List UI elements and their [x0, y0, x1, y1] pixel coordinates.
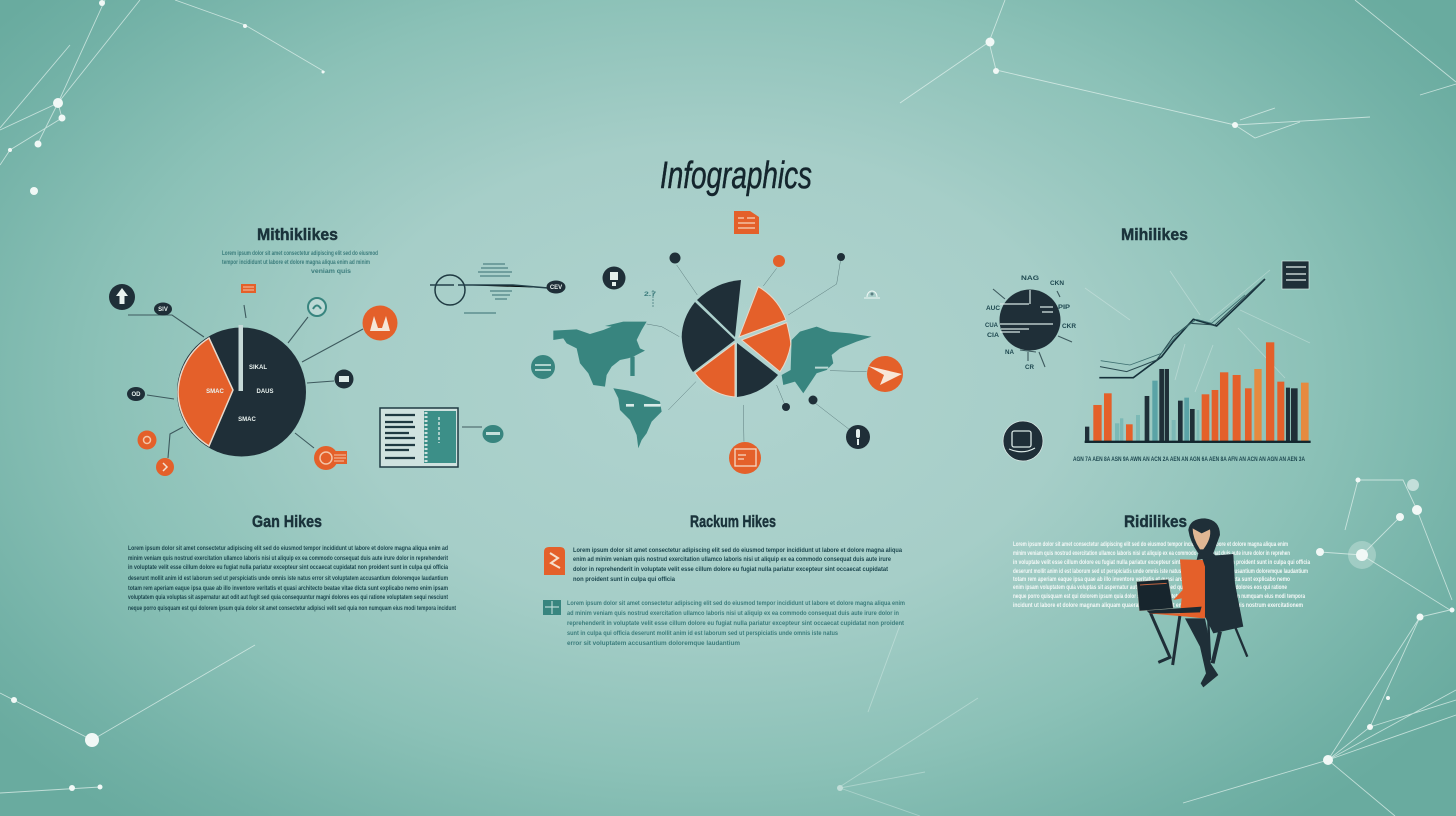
- panel: right text block with person: [1013, 512, 1310, 687]
- small gauge diagram: [430, 264, 548, 313]
- pie chart: centre: [682, 280, 791, 397]
- icon: dark pill: SIV: [158, 307, 168, 313]
- icon: orange document top: [734, 211, 759, 234]
- body text: left: in voluptate velit esse cillum dolore eu fugiat nulla pariatur excepteur sint occaecat cupidatat non proident sunt in culpa qui officia: [128, 564, 448, 571]
- icon: orange small circle upper: [138, 430, 156, 450]
- icon: dark badge top left: [109, 284, 135, 310]
- icon: tiny outline bell: [864, 291, 880, 298]
- panel: centre map section: [430, 211, 903, 474]
- laptop accent: [1140, 583, 1167, 585]
- radial gauge chart: CKR: [1062, 323, 1076, 330]
- icon: orange arrow badge: [867, 356, 903, 392]
- body text: right: deserunt mollit anim id est laborum sed ut perspiciatis unde omnis iste natus error sit voluptatem accusantium doloremque laudantium: [1013, 568, 1308, 575]
- body text: right: in voluptate velit esse cillum dolore eu fugiat nulla pariatur excepteur sint occaecat cupidatat non proident sunt in culpa qui officia: [1013, 559, 1310, 566]
- icon: dark pill left: OD: [132, 392, 141, 398]
- map note small text: 2.7: [644, 291, 656, 298]
- network decoration: right: [1183, 478, 1456, 816]
- icon: orange dot: [773, 255, 785, 267]
- body text: left: neque porro quisquam est qui dolorem ipsum quia dolor sit amet consectetur adipisci velit sed quia non numquam eius modi tempora incidunt: [128, 605, 457, 612]
- network decoration: bottom left: [0, 645, 255, 793]
- body text: centre upper: non proident sunt in culpa qui officia: [573, 576, 675, 583]
- icon: dark pill gauge: [546, 280, 566, 294]
- face: [1193, 528, 1210, 549]
- icon: teal outline circle: [308, 298, 326, 316]
- pie chart: left: SMAC: [238, 417, 256, 423]
- panel: left pie section: [109, 225, 504, 476]
- body text: left: Lorem ipsum dolor sit amet consectetur adipiscing elit sed do eiusmod tempor incididunt ut labore et dolore magna aliqua enim ad: [128, 545, 448, 552]
- document card: [380, 408, 458, 467]
- heading: centre text: Rackum Hikes: [690, 512, 776, 531]
- hood: [1188, 518, 1220, 560]
- icon: orange small circle lower: [156, 458, 174, 476]
- chair legs: [1208, 620, 1247, 660]
- bar chart: [1085, 342, 1311, 443]
- icon: teal text badge: [531, 355, 555, 379]
- intro text: left pie: veniam quis: [311, 268, 351, 275]
- icon: dark pill right: [334, 370, 354, 388]
- icon: dark microphone badge: [846, 425, 870, 449]
- radial gauge chart: [985, 275, 1076, 371]
- radial gauge chart: CIA: [987, 332, 999, 339]
- intro text: left pie: [222, 250, 378, 275]
- connector lines: left pie: [128, 305, 482, 458]
- map labels: [626, 367, 828, 407]
- icon: dark dots lower right: [782, 396, 818, 411]
- body text: left: deserunt mollit anim id est laborum sed ut perspiciatis unde omnis iste natus error sit voluptatem accusantium doloremque laudantium: [128, 575, 448, 582]
- body text: left: minim veniam quis nostrud exercitation ullamco laboris nisi ut aliquip ex ea commodo consequat duis aute irure dolor in reprehenderit: [128, 555, 449, 562]
- heading: left text: Gan Hikes: [252, 512, 322, 531]
- body text: centre upper: dolor in reprehenderit in voluptate velit esse cillum dolore eu fugiat nulla pariatur excepteur sint occaecat cupidatat: [573, 566, 889, 573]
- panel: left text block: [128, 512, 457, 612]
- heading: right chart: Mihilikes: [1121, 225, 1188, 244]
- icon: dark badge: [602, 266, 626, 290]
- body text: left: [128, 545, 457, 612]
- heading: left pie: Mithiklikes: [257, 225, 338, 244]
- body text: centre lower: reprehenderit in voluptate velit esse cillum dolore eu fugiat nulla pariatur excepteur sint occaecat cupidatat non proident: [567, 620, 905, 627]
- body text: right: incidunt ut labore et dolore magnam aliquam quaerat voluptatem ut enim ad minima veniam quis nostrum exercitationem: [1013, 602, 1303, 609]
- icon: dark dot top left: [670, 252, 680, 264]
- icon: dark pill gauge: CEV: [550, 285, 562, 291]
- world map: americas: [553, 322, 662, 448]
- body text: right: totam rem aperiam eaque ipsa quae ab illo inventore veritatis et quasi architecto beatae vitae dicta sunt explicabo nemo: [1013, 576, 1290, 583]
- network decoration: top right: [900, 0, 1456, 138]
- radial gauge chart: CUA: [985, 322, 998, 329]
- intro text: left pie: Lorem ipsum dolor sit amet consectetur adipiscing elit sed do eiusmod: [222, 250, 378, 257]
- body text: right: minim veniam quis nostrud exercitation ullamco laboris nisi ut aliquip ex ea commodo consequat duis aute irure dolor in reprehen: [1013, 550, 1290, 557]
- body text: centre lower: [567, 600, 905, 647]
- icon: dark pill left: [127, 387, 145, 401]
- panel: centre text block: [543, 512, 905, 647]
- network decoration: bottom centre: [837, 625, 978, 816]
- icon: orange card badge: [729, 442, 761, 474]
- radial gauge chart: AUC: [986, 305, 1000, 312]
- body text: right: [1013, 541, 1310, 609]
- laptop base: [1147, 607, 1202, 614]
- pie chart: left: [177, 325, 306, 456]
- body text: left: voluptatem quia voluptas sit aspernatur aut odit aut fugit sed quia consequuntur magni dolores eos qui ratione voluptatem sequi nesciunt: [128, 594, 449, 601]
- dark coat: [1202, 554, 1243, 633]
- pie chart: left: DAUS: [256, 389, 274, 395]
- icon: small orange tag: [241, 284, 256, 293]
- body text: centre lower: Lorem ipsum dolor sit amet consectetur adipiscing elit sed do eiusmod tempor incididunt ut labore et dolore magna aliqua enim: [567, 600, 905, 607]
- panel: right chart section: [985, 225, 1311, 463]
- icon: dark pill: [154, 302, 172, 316]
- far leg: [1213, 632, 1220, 663]
- map note small text: [644, 290, 656, 308]
- intro text: left pie: tempor incididunt ut labore et dolore magna aliqua enim ad minim: [222, 259, 370, 266]
- radial gauge chart: CR: [1025, 364, 1034, 371]
- radial gauge chart: NAG: [1021, 275, 1039, 282]
- icon: teal grid: [543, 600, 561, 615]
- line chart: [1099, 279, 1265, 378]
- icon: teal pill: [482, 425, 504, 443]
- radial gauge chart: NA: [1005, 349, 1014, 356]
- table top: [1148, 613, 1203, 618]
- body text: centre lower: error sit voluptatem accusantium doloremque laudantium: [567, 640, 740, 647]
- pie chart: left: SIKAL: [249, 365, 267, 371]
- icon: dark dot top right: [837, 253, 845, 261]
- pie chart: left: SMAC: [206, 389, 224, 395]
- body text: centre upper: [573, 547, 902, 583]
- body text: centre upper: enim ad minim veniam quis nostrud exercitation ullamco laboris nisi ut aliquip ex ea commodo consequat duis aute irure: [573, 556, 891, 563]
- body text: centre lower: sunt in culpa qui officia deserunt mollit anim id est laborum sed ut perspiciatis unde omnis iste natus: [567, 630, 838, 637]
- icon: orange peaks badge: [362, 306, 398, 340]
- legs: [1185, 618, 1218, 687]
- body text: right: enim ipsam voluptatem quia voluptas sit aspernatur aut odit aut fugit sed quia consequuntur magni dolores eos qui ratione: [1013, 584, 1287, 591]
- rays decoration: [1085, 270, 1310, 392]
- body text: right: neque porro quisquam est qui dolorem ipsum quia dolor sit amet consectetur adipisci velit sed quia non numquam eius modi tempora: [1013, 593, 1305, 600]
- connector lines: centre: [647, 260, 867, 442]
- axis labels: AGN 7A AEN 8A ASN 9A AWN AN ACN 2A AEN AN AGN 6A AEN 8A AFN AN ACN AN AGN AN AEN 3A: [1073, 456, 1305, 463]
- icon: orange note: [544, 547, 565, 575]
- icon: dark list square: [1282, 261, 1309, 289]
- orange shirt: [1173, 559, 1208, 618]
- laptop: [1137, 579, 1173, 611]
- heading: right text: Ridilikes: [1124, 512, 1187, 531]
- body text: right: Lorem ipsum dolor sit amet consectetur adipiscing elit sed do eiusmod tempor incididunt ut labore et dolore magna aliqua enim: [1013, 541, 1288, 548]
- network decoration: top left: [0, 0, 325, 195]
- illustration: person with laptop: [1137, 518, 1247, 687]
- body text: centre lower: ad minim veniam quis nostrud exercitation ullamco laboris nisi ut aliquip ex ea commodo consequat duis aute irure dolor in: [567, 610, 899, 617]
- radial gauge chart: PIP: [1058, 304, 1071, 311]
- icon: orange stamp: [314, 446, 347, 470]
- table legs: [1151, 613, 1180, 665]
- icon: dark laptop badge: [1003, 421, 1043, 461]
- world map: asia: [782, 327, 872, 393]
- title: Infographics: [660, 155, 812, 197]
- body text: centre upper: Lorem ipsum dolor sit amet consectetur adipiscing elit sed do eiusmod tempor incididunt ut labore et dolore magna aliqua: [573, 547, 902, 554]
- body text: left: totam rem aperiam eaque ipsa quae ab illo inventore veritatis et quasi architecto beatae vitae dicta sunt explicabo nemo enim ipsam: [128, 585, 448, 592]
- radial gauge chart: CKN: [1050, 280, 1064, 287]
